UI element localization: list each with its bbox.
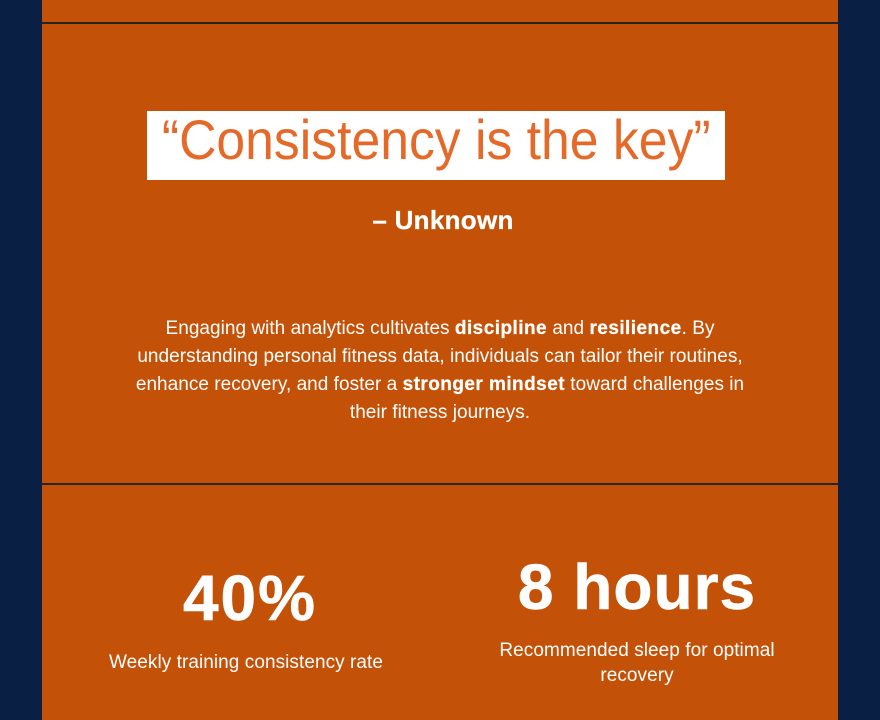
- quote box: “Consistency is the key”: [162, 108, 711, 171]
- body paragraph: understanding personal fitness data, individuals can tailor their routines,: [137, 346, 743, 367]
- body paragraph: [136, 318, 744, 423]
- stat label: recommended sleep: Recommended sleep for optimal: [499, 640, 775, 661]
- body paragraph: their fitness journeys.: [350, 402, 530, 423]
- stat value: 40%: 40%: [183, 562, 317, 634]
- stat label: recommended sleep: [499, 640, 775, 686]
- stat value: 8 hours: 8 hours: [518, 551, 756, 623]
- body paragraph: Engaging with analytics cultivates discipline and resilience. By: [166, 318, 714, 339]
- body paragraph: enhance recovery, and foster a stronger mindset toward challenges in: [136, 374, 744, 395]
- stat: 40%: [109, 562, 383, 673]
- quote attribution: – Unknown: [372, 205, 514, 235]
- stat label: recommended sleep: recovery: [600, 665, 674, 686]
- stat label: training consistency: Weekly training consistency rate: [109, 652, 383, 673]
- stat: 8 hours: [499, 551, 775, 686]
